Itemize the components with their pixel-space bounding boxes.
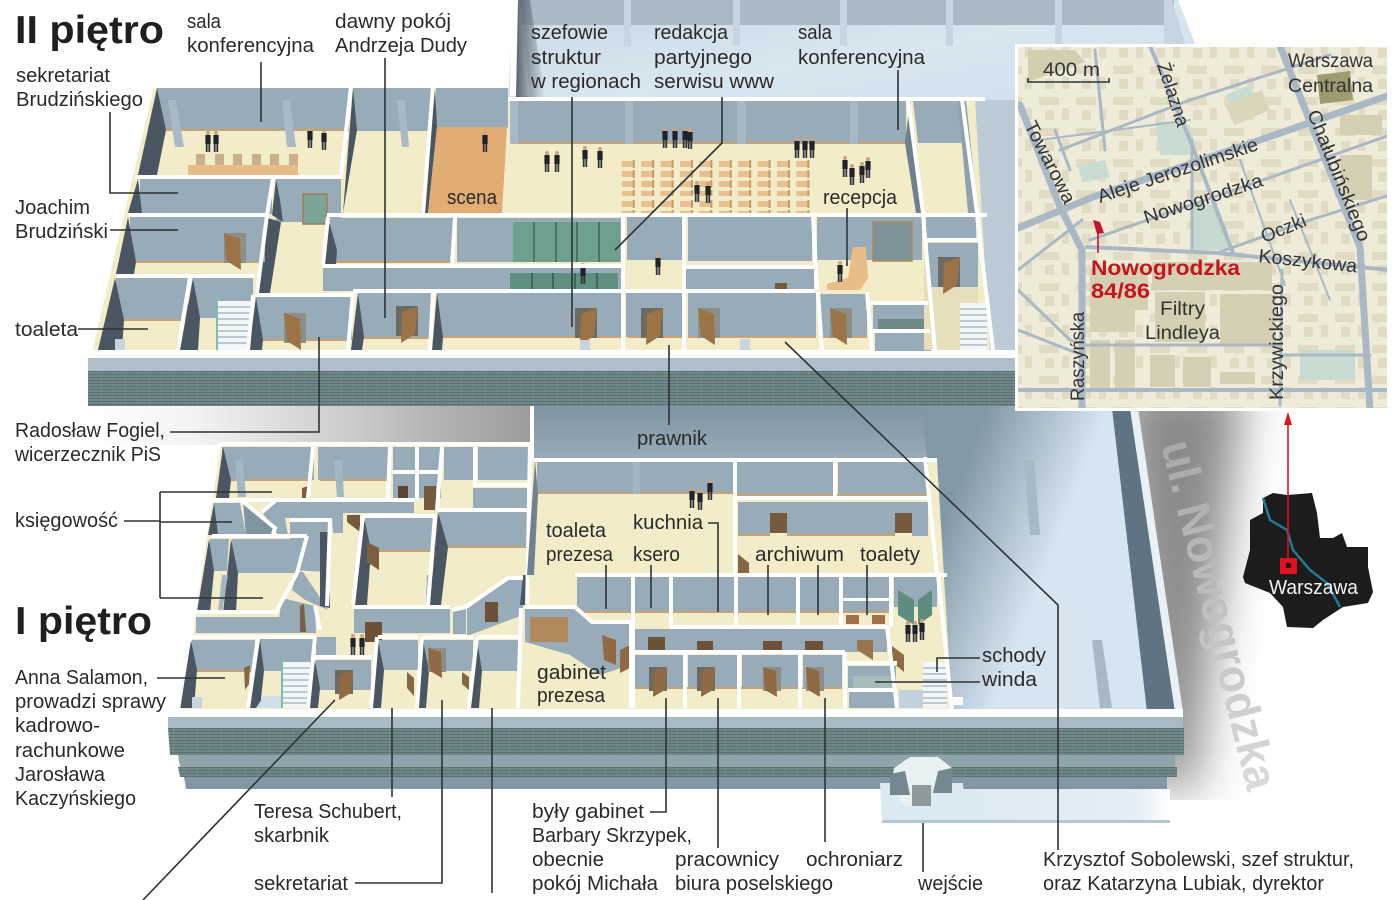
room: Teresa Schubert	[371, 640, 418, 708]
icon: Warsaw silhouette with river and marker	[1243, 493, 1373, 628]
icon: Warsaw silhouette with river and marker: Warszawa	[1269, 577, 1359, 599]
labels: second floor: Radosław Fogiel,	[15, 420, 165, 442]
labels: first floor: prezesa	[546, 544, 614, 566]
room: dawny pokój Andrzeja Dudy	[351, 293, 432, 350]
labels: second floor: dawny pokój	[335, 11, 451, 33]
heading: I piętro: I piętro	[15, 600, 152, 643]
leader lines	[78, 58, 1058, 900]
map: street names: Chałubińskiego	[1302, 107, 1374, 245]
wall tops left block	[178, 444, 530, 710]
room: glass doors redakcja	[323, 218, 623, 291]
labels: first floor: Teresa Schubert,	[254, 801, 402, 823]
room: księgowość middle	[208, 502, 328, 572]
room: gabinet prezesa	[525, 608, 630, 675]
room: corridor with green door	[255, 179, 341, 293]
labels: first floor: były gabinet	[532, 801, 644, 823]
entrance with steps	[880, 757, 1170, 823]
room: second hall	[343, 88, 431, 213]
map: street names: Aleje Jerozolimskie	[1095, 135, 1261, 208]
labels: second floor: Brudziński	[15, 221, 108, 243]
map: street names: Towarowa	[1020, 118, 1079, 208]
street name: ul. Nowogrodzka: ul. Nowogrodzka	[1151, 435, 1288, 795]
room: middle row left	[324, 218, 453, 264]
panel: second floor plan (II piętro)	[88, 86, 1020, 406]
corridor wall	[262, 502, 414, 535]
room: scene stage	[421, 88, 508, 213]
roof area behind the first floor	[534, 406, 932, 460]
shadow of the building on the street	[1115, 380, 1245, 790]
room: lift and shaft second floor	[873, 305, 931, 351]
room: księgowość top left	[216, 447, 314, 498]
labels: first floor: schody	[982, 645, 1046, 667]
wall tops right block	[525, 457, 952, 710]
labels: second floor: redakcja	[654, 22, 729, 44]
labels: first floor: archiwum	[755, 544, 844, 566]
room: conference hall left	[138, 88, 349, 176]
labels: first floor: ochroniarz	[806, 849, 903, 871]
map: station label	[1288, 51, 1373, 97]
labels: second floor: toaleta	[15, 319, 79, 341]
labels: first floor: toaleta	[546, 520, 607, 542]
labels: first floor	[15, 510, 1354, 895]
map: scale bar 400 m: 400 m	[1043, 60, 1100, 81]
labels: second floor: konferencyjna	[187, 35, 315, 57]
map: street names: Filtry	[1160, 299, 1206, 320]
room: center corridor	[627, 217, 683, 275]
labels: first floor: wejście	[917, 873, 983, 895]
room: sekretariat Brudzińskiego	[128, 179, 272, 214]
labels: first floor: Jarosława	[15, 764, 106, 786]
room: Krzysztof Sobolewski	[688, 293, 816, 350]
room: toaleta	[98, 278, 188, 350]
labels: second floor: sala	[798, 22, 833, 44]
labels: first floor: toalety	[860, 544, 920, 566]
floor surfaces	[182, 445, 952, 710]
map: scale bar 400 m	[1028, 60, 1109, 82]
labels: first floor: prowadzi sprawy	[15, 691, 166, 713]
back wall of the roof with pillars	[510, 0, 1186, 97]
labels: first floor: kadrowo-	[15, 715, 100, 737]
arrow: from Warsaw to the map	[1284, 412, 1292, 560]
room: small closet and office	[309, 634, 371, 708]
labels: second floor: szefowie	[531, 22, 608, 44]
map: street names: Oczki	[1258, 211, 1309, 248]
room: recepcja	[817, 217, 922, 290]
map: station label: Centralna	[1288, 76, 1373, 97]
labels: first floor: kuchnia	[633, 512, 704, 534]
room: sekretariat	[417, 640, 473, 708]
room: top second	[318, 447, 390, 497]
labels: first floor: winda	[981, 669, 1038, 691]
labels: first floor: oraz Katarzyna Lubiak, dyrektor	[1043, 873, 1324, 895]
room: Radosław Fogiel	[249, 297, 352, 350]
labels: second floor: sala	[187, 11, 222, 33]
labels: first floor: rachunkowe	[15, 740, 125, 762]
labels: first floor: Barbary Skrzypek,	[532, 825, 692, 847]
shadow gap left under second floor	[90, 406, 530, 445]
shaded terrace right of second floor	[975, 100, 1020, 352]
room: small office next to reception	[820, 294, 867, 345]
angled walls middle	[196, 532, 330, 633]
room: top right corner left block	[444, 447, 528, 508]
map: building marker	[1091, 220, 1240, 303]
labels: first floor: księgowość	[15, 510, 118, 532]
labels: first floor: prezesa	[537, 685, 606, 707]
labels: second floor: serwisu www	[654, 71, 775, 93]
heading: II piętro: II piętro	[15, 9, 164, 52]
labels: second floor: sekretariat	[16, 65, 110, 87]
room: center right	[684, 217, 814, 290]
room: Joachim Brudziński	[116, 217, 265, 274]
labels: second floor	[14, 11, 926, 466]
room: right column with stairs	[924, 215, 987, 350]
labels: first floor: Kaczyńskiego	[15, 788, 136, 810]
labels: second floor: Andrzeja Dudy	[335, 35, 467, 57]
labels: first floor: pracownicy	[675, 849, 779, 871]
map: large blocks and parks	[1028, 50, 1382, 390]
labels: first floor: gabinet	[537, 662, 606, 684]
room: archive row	[738, 502, 928, 573]
map: streets	[1018, 46, 1390, 410]
front facade of first floor	[168, 709, 1184, 789]
map: street names: Nowogrodzka	[1141, 170, 1266, 229]
labels: first floor: Anna Salamon,	[15, 667, 148, 689]
wall below the offices	[354, 609, 450, 642]
room: Anna Salamon	[180, 640, 256, 708]
map: street names: Koszykowa	[1257, 246, 1359, 277]
labels: second floor: wicerzecznik PiS	[14, 444, 161, 466]
labels: first floor: ksero	[633, 544, 680, 566]
labels: second floor: Brudzińskiego	[16, 89, 143, 111]
rooms: front row offices	[635, 655, 842, 697]
labels: first floor: skarbnik	[254, 825, 330, 847]
map: building marker: 84/86	[1091, 280, 1150, 303]
panel: first floor plan (I piętro)	[168, 406, 1184, 789]
front facade of second floor	[88, 350, 1020, 406]
room: staircase left	[180, 278, 253, 350]
white slab end tabs	[953, 697, 963, 705]
labels: first floor: sekretariat	[254, 873, 348, 895]
labels: second floor: prawnik	[637, 428, 708, 450]
room: centre right office	[430, 512, 530, 636]
room: corridor wall with doors	[635, 629, 887, 660]
labels: second floor: w regionach	[530, 71, 641, 93]
labels: second floor: scena	[447, 187, 498, 209]
map: street names: Żelazna	[1152, 60, 1193, 130]
dark inner wall at right	[1112, 408, 1175, 712]
map: station label: Warszawa	[1288, 51, 1373, 72]
room: prawnik	[626, 293, 683, 345]
labels: second floor: Joachim	[15, 197, 90, 219]
room: main hall with chairs	[510, 100, 906, 213]
room: centre left office	[347, 515, 435, 605]
labels: first floor: biura poselskiego	[675, 873, 833, 895]
room: top right two	[737, 462, 928, 497]
roof area right of the first floor	[922, 406, 1175, 712]
map: street names	[1020, 60, 1374, 401]
labels: second floor: partyjnego	[654, 47, 752, 69]
labels: second floor: recepcja	[823, 187, 898, 209]
room: staircase first floor	[250, 639, 313, 708]
room: last office left block	[468, 640, 520, 708]
labels: first floor: Krzysztof Sobolewski, szef struktur,	[1043, 849, 1354, 871]
map: street names: Raszyńska	[1068, 312, 1089, 401]
map: street names: Krzywickiego	[1267, 284, 1288, 400]
panel: locator map of the neighbourhood	[1015, 44, 1390, 411]
wall tops second floor	[90, 86, 993, 352]
labels: second floor: konferencyjna	[798, 47, 926, 69]
room row: toaleta prezesa, ksero, kuchnia, archiwum, toalety	[577, 577, 890, 624]
map: street names: Lindleya	[1145, 323, 1220, 344]
room: kuchnia and hall	[527, 460, 734, 575]
visitors	[544, 127, 871, 203]
background: roof behind second floor	[508, 0, 1196, 110]
labels: first floor: pokój Michała	[532, 873, 659, 895]
room: winda	[848, 666, 897, 708]
labels: first floor: obecnie	[532, 849, 604, 871]
room: księgowość large	[197, 539, 306, 614]
floor surfaces	[92, 88, 993, 352]
room: vestibule with glass door and stairs	[892, 577, 947, 708]
map: building marker: Nowogrodzka	[1091, 257, 1240, 280]
labels: second floor: struktur	[531, 47, 601, 69]
room: szefowie struktur	[432, 293, 623, 350]
chairs	[621, 160, 811, 196]
small rooms top	[393, 447, 441, 510]
room: far right of hall	[905, 100, 978, 213]
